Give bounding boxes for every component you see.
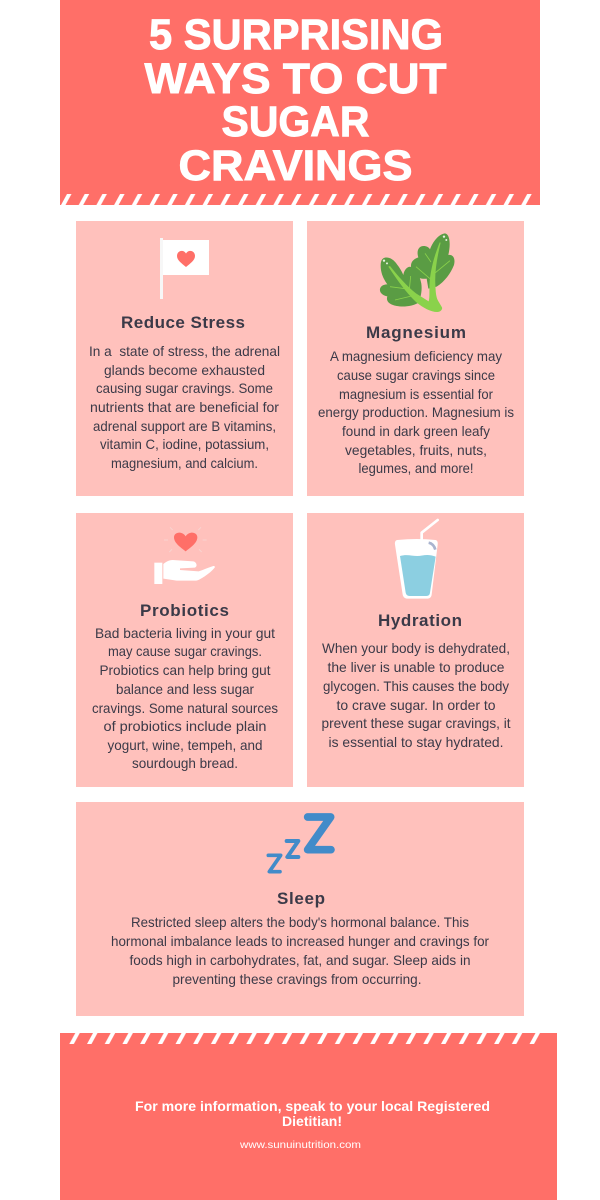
body text: legumes, and more! xyxy=(358,461,474,476)
title: SUGAR xyxy=(222,98,370,146)
website: www.sunuinutrition.com xyxy=(239,1139,361,1151)
icon: flag with heart xyxy=(160,238,209,299)
body text: glands become exhausted xyxy=(104,363,265,378)
title: CRAVINGS xyxy=(178,142,412,190)
body text: vitamin C, iodine, potassium, xyxy=(100,437,269,452)
body text: balance and less sugar xyxy=(116,682,254,697)
body text: In a state of stress, the adrenal xyxy=(89,344,280,359)
panel: probiotics xyxy=(76,513,293,787)
heading: Reduce Stress xyxy=(121,313,245,332)
footer banner xyxy=(60,1033,557,1200)
body text: Bad bacteria living in your gut xyxy=(95,626,275,641)
body text xyxy=(322,641,511,750)
body text: A magnesium deficiency may xyxy=(330,349,502,364)
body text: Probiotics can help bring gut xyxy=(100,663,271,678)
panel: hydration xyxy=(307,513,524,787)
body text xyxy=(92,626,278,771)
body text: sourdough bread. xyxy=(132,756,238,771)
body text: cause sugar cravings since xyxy=(337,368,495,383)
footer message: Dietitian! xyxy=(282,1113,342,1129)
body text: Restricted sleep alters the body's hormonal balance. This xyxy=(131,915,469,930)
body text: magnesium is essential for xyxy=(339,387,493,402)
body text: yogurt, wine, tempeh, and xyxy=(108,738,262,753)
body text: nutrients that are beneficial for xyxy=(90,400,279,415)
title xyxy=(144,11,446,190)
footer message xyxy=(135,1098,490,1129)
body text: causing sugar cravings. Some xyxy=(96,381,273,396)
heading: Sleep xyxy=(277,889,325,908)
body text: the liver is unable to produce xyxy=(328,660,504,675)
body text xyxy=(111,915,489,987)
header banner xyxy=(60,0,540,206)
icon: leafy greens xyxy=(380,233,454,312)
icon: zzz xyxy=(268,817,331,872)
title: 5 SURPRISING xyxy=(149,11,443,59)
icon: glass of water xyxy=(395,520,438,599)
panel: reduce stress xyxy=(76,221,293,496)
body text: of probiotics include plain xyxy=(104,719,266,734)
panel: magnesium xyxy=(307,221,524,496)
heading: Magnesium xyxy=(366,323,466,342)
body text: to crave sugar. In order to xyxy=(336,698,496,713)
body text: magnesium, and calcium. xyxy=(111,456,258,471)
body text: is essential to stay hydrated. xyxy=(328,735,504,750)
body text: prevent these sugar cravings, it xyxy=(322,716,511,731)
body text: adrenal support are B vitamins, xyxy=(93,419,276,434)
body text: energy production. Magnesium is xyxy=(318,405,514,420)
body text: hormonal imbalance leads to increased hunger and cravings for xyxy=(111,934,489,949)
body text: foods high in carbohydrates, fat, and sugar. Sleep aids in xyxy=(130,953,470,968)
footer message: For more information, speak to your local Registered xyxy=(135,1098,490,1114)
body text: preventing these cravings from occurring. xyxy=(172,972,422,987)
body text xyxy=(318,349,514,476)
body text: When your body is dehydrated, xyxy=(322,641,510,656)
body text xyxy=(89,344,280,471)
body text: cravings. Some natural sources xyxy=(92,701,278,716)
heading: Probiotics xyxy=(140,601,229,620)
body text: found in dark green leafy xyxy=(342,424,490,439)
heading: Hydration xyxy=(378,611,462,630)
panel: sleep xyxy=(76,802,524,1016)
body text: may cause sugar cravings. xyxy=(108,644,262,659)
icon: hand holding heart xyxy=(154,527,215,584)
body text: glycogen. This causes the body xyxy=(323,679,509,694)
body text: vegetables, fruits, nuts, xyxy=(345,443,487,458)
title: WAYS TO CUT xyxy=(144,55,446,103)
